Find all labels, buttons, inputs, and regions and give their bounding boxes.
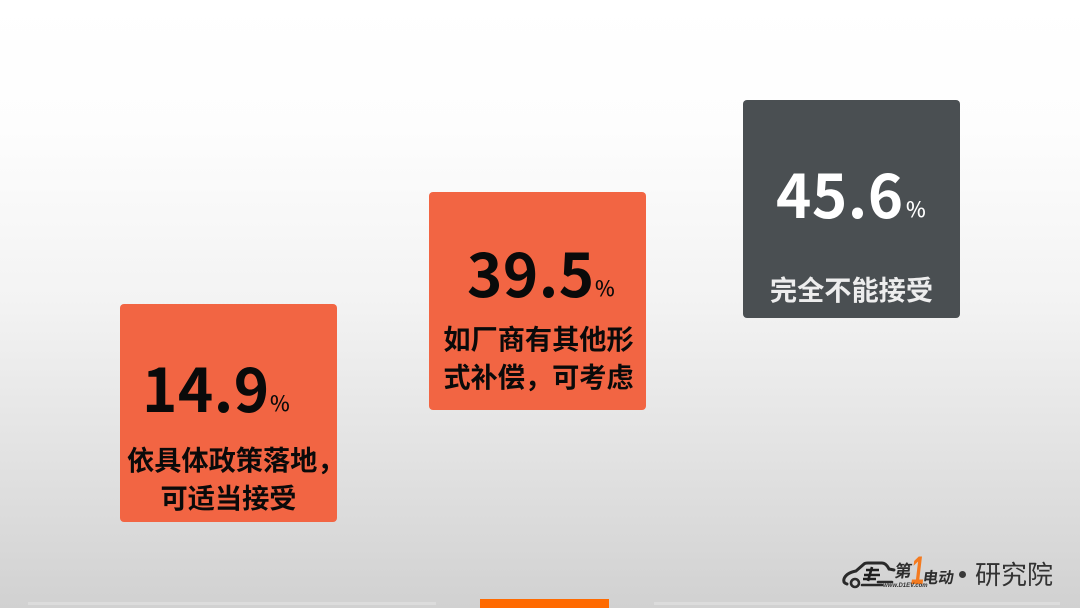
label: 依具体政策落地， <box>127 438 345 478</box>
logo text: 研究院: 研究院 <box>975 555 1053 592</box>
label <box>127 438 345 516</box>
label: 完全不能接受 <box>770 268 933 308</box>
value: 39.5: 39.5 <box>467 228 595 315</box>
card: 45.6% completely unacceptable <box>743 100 960 318</box>
label: 可适当接受 <box>161 476 296 516</box>
value: 14.9: 14.9 <box>142 343 270 430</box>
label <box>443 317 634 395</box>
footer line right <box>654 602 1060 605</box>
label: 式补偿，可考虑 <box>443 355 634 395</box>
footer line left <box>28 602 436 605</box>
logo numeral 1: 1 <box>911 549 924 593</box>
logo text: 第: 第 <box>893 557 914 582</box>
footer orange tab <box>480 599 609 608</box>
card: 39.5% consider with compensation <box>429 192 646 410</box>
percent sign: % <box>595 273 615 303</box>
value: 45.6: 45.6 <box>776 149 904 236</box>
percent sign: % <box>270 388 290 418</box>
logo text: 电动: 电动 <box>921 566 956 588</box>
label: 如厂商有其他形 <box>443 317 634 357</box>
logo: research institute <box>842 549 1053 593</box>
logo dot <box>959 571 966 578</box>
icon: car outline <box>842 562 896 588</box>
logo url: www.D1EV.com <box>883 583 928 589</box>
card: 14.9% acceptable depending on policy <box>120 304 337 522</box>
percent sign: % <box>906 194 926 224</box>
